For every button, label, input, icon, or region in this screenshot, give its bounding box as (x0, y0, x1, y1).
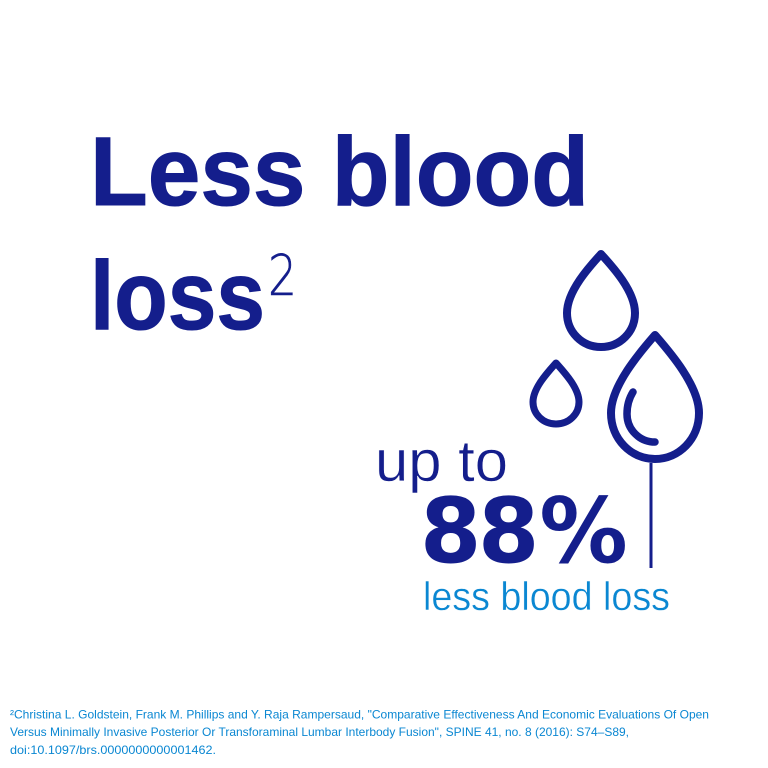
title: 2 (268, 244, 297, 309)
icon: large drop with stem (611, 335, 699, 568)
title: Less blood (90, 117, 589, 226)
icon: medium drop (567, 254, 635, 347)
footnote (10, 708, 709, 757)
title: loss (90, 241, 265, 350)
icon: small drop (533, 363, 579, 424)
statistic label: less blood loss (423, 575, 670, 619)
statistic: up to: up to (375, 429, 508, 494)
footnote: ²Christina L. Goldstein, Frank M. Phillips and Y. Raja Rampersaud, "Comparative Effectiveness And Economic Evaluations Of Open (10, 708, 709, 722)
statistic: 88%: 88% (420, 479, 628, 584)
footnote: doi:10.1097/brs.0000000000001462. (10, 743, 216, 757)
title (90, 117, 589, 350)
footnote: Versus Minimally Invasive Posterior Or Transforaminal Lumbar Interbody Fusion", SPINE 41, no. 8 (2016): S74–S89, (10, 725, 629, 739)
